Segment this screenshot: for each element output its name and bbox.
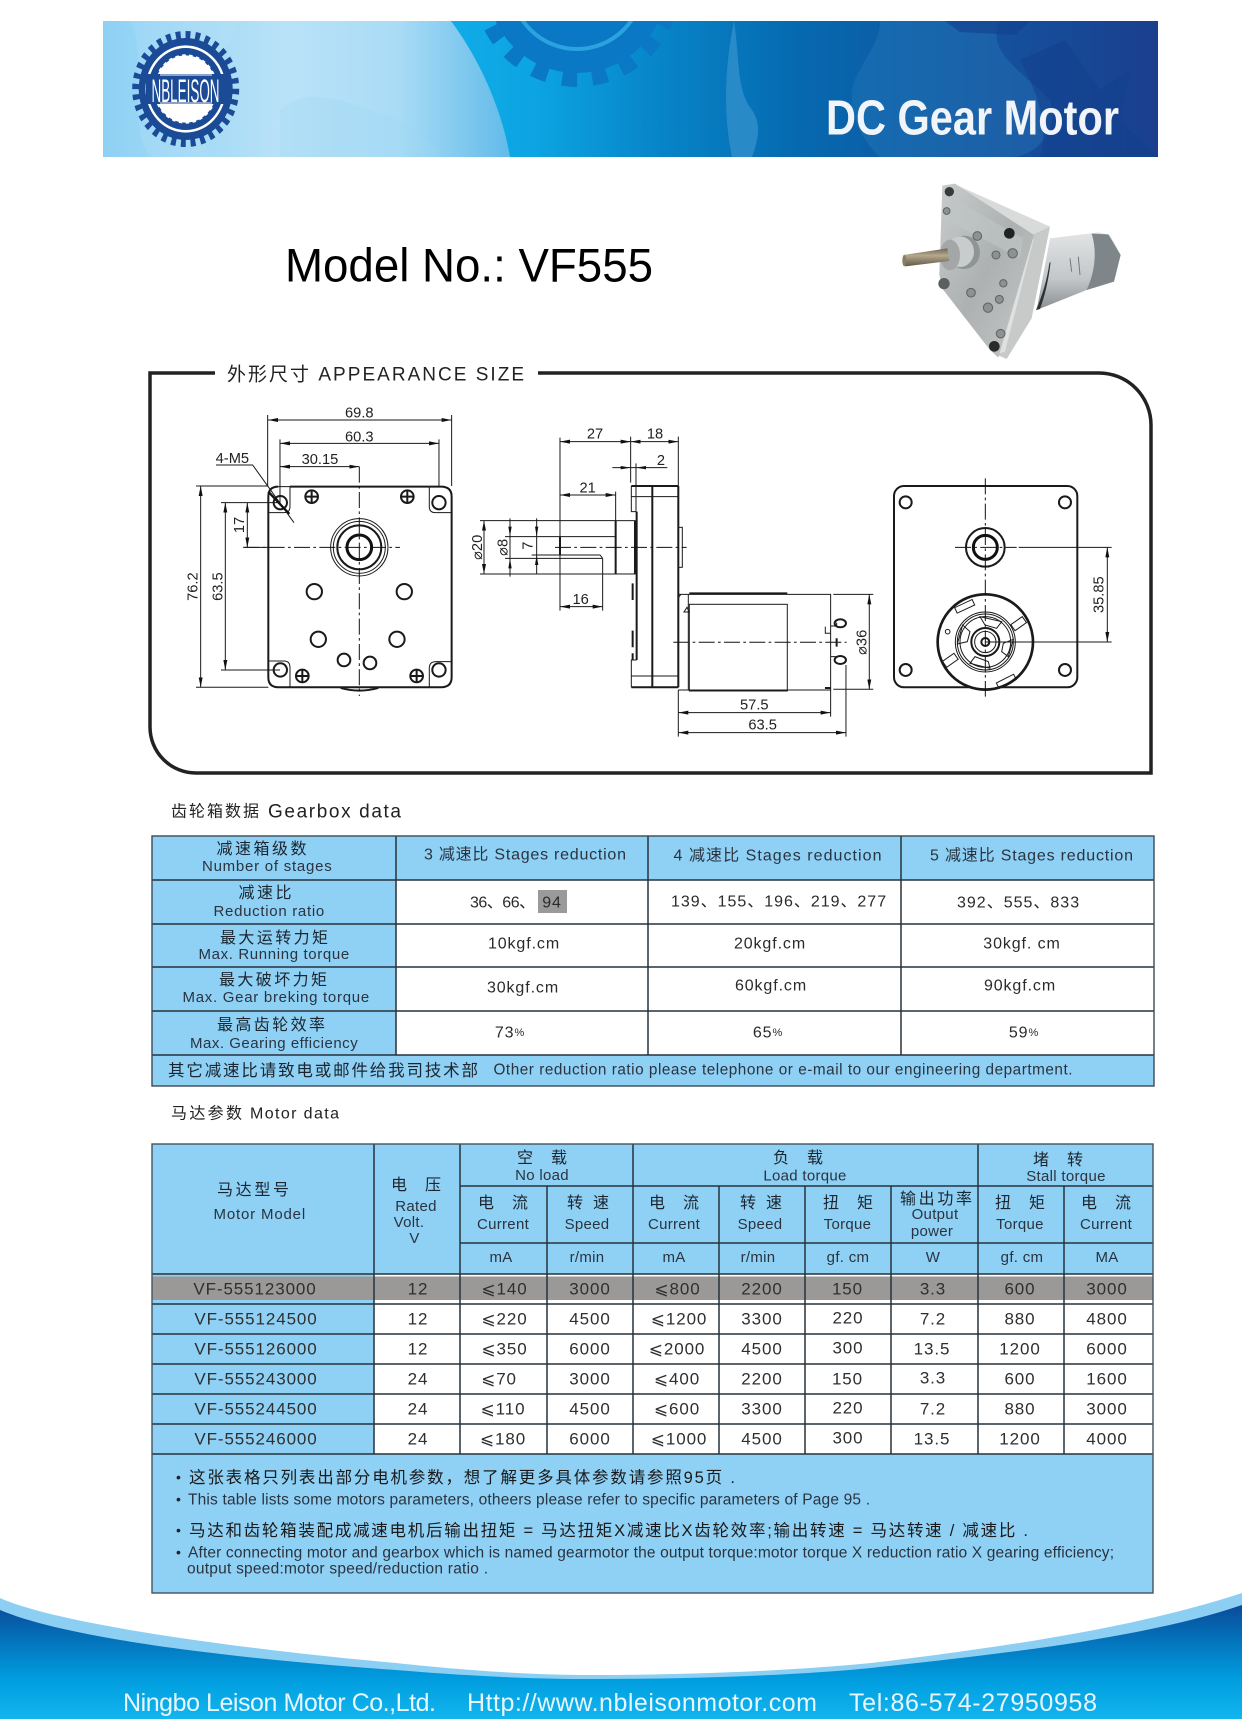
row: VF-555246000: ⩽180 bbox=[480, 1430, 526, 1448]
row: max running torque: 最大运转力矩 bbox=[220, 929, 328, 947]
row: VF-555243000: 2200 bbox=[741, 1370, 783, 1388]
row: VF-555124500: 7.2 bbox=[920, 1310, 946, 1328]
row: VF-555243000 bbox=[194, 1368, 1128, 1388]
row: other ratios note: Other reduction ratio please telephone or e-mail to our engineering department. bbox=[494, 1062, 1072, 1078]
header cells: Current bbox=[477, 1216, 530, 1233]
row: max gear breaking torque: 30kgf.cm bbox=[487, 980, 559, 996]
heading: motor data: Motor data bbox=[250, 1106, 339, 1122]
highlighted ratio 94 bbox=[538, 890, 567, 913]
panel heading: 外形尺寸 APPEARANCE SIZE bbox=[227, 364, 524, 386]
row: VF-555123000: VF-555123000 bbox=[193, 1280, 317, 1298]
heading: gearbox data bbox=[171, 802, 401, 822]
row: VF-555246000: 300 bbox=[832, 1428, 864, 1448]
notes block: • bbox=[176, 1491, 181, 1507]
header cells: r/min bbox=[570, 1249, 604, 1266]
footer contact line bbox=[123, 1689, 1097, 1717]
header cells: mA bbox=[662, 1249, 686, 1266]
drawing: side view: 27 bbox=[587, 426, 603, 442]
row: number of stages: 减速箱级数 bbox=[216, 840, 306, 858]
notes block: 马达和齿轮箱装配成减速电机后输出扭矩 = 马达扭矩X减速比X齿轮效率;输出转速 = 马达转速 / 减速比 . bbox=[189, 1521, 1028, 1540]
row: VF-555124500: ⩽1200 bbox=[651, 1310, 707, 1328]
row: VF-555246000: 1200 bbox=[999, 1430, 1041, 1448]
row: VF-555126000: 6000 bbox=[1086, 1340, 1128, 1358]
header cells: 电 流 bbox=[478, 1194, 528, 1212]
row: VF-555126000: 13.5 bbox=[914, 1340, 950, 1358]
row: VF-555246000: VF-555246000 bbox=[194, 1430, 318, 1448]
row: other ratios note bbox=[168, 1061, 1072, 1080]
row: VF-555126000: 1200 bbox=[999, 1340, 1041, 1358]
row: VF-555124500: 12 bbox=[408, 1310, 428, 1328]
icon: company gear logo: NBLEISON bbox=[152, 73, 220, 109]
drawing: side view: 63.5 bbox=[748, 718, 777, 734]
row: max gearing efficiency bbox=[190, 1016, 1039, 1052]
row: max gearing efficiency: 最高齿轮效率 bbox=[217, 1016, 325, 1034]
row: VF-555123000: 12 bbox=[408, 1280, 428, 1298]
row: VF-555124500: 3300 bbox=[741, 1310, 783, 1328]
row: max gearing efficiency: 59% bbox=[1009, 1024, 1039, 1042]
product photo: gear motor bbox=[902, 184, 1121, 359]
row: VF-555123000: ⩽140 bbox=[481, 1280, 528, 1298]
header cells: 转 速 bbox=[740, 1194, 782, 1212]
drawing: side view: 21 bbox=[579, 480, 596, 496]
row: VF-555126000: ⩽350 bbox=[481, 1340, 528, 1358]
row: VF-555123000: 3000 bbox=[1086, 1280, 1128, 1298]
header cells: 电 流 bbox=[1081, 1194, 1131, 1212]
row: reduction ratio: 139、155、196、219、277 bbox=[671, 894, 887, 910]
heading: motor data: 马达参数 bbox=[171, 1104, 242, 1122]
row: VF-555124500: ⩽220 bbox=[481, 1310, 528, 1328]
row: max running torque: 20kgf.cm bbox=[734, 936, 806, 952]
row: VF-555126000: 4500 bbox=[741, 1340, 783, 1358]
row: VF-555123000: 2200 bbox=[741, 1280, 783, 1298]
row: VF-555244500: VF-555244500 bbox=[194, 1400, 318, 1418]
header cells: Speed bbox=[565, 1216, 609, 1233]
row: VF-555126000 bbox=[194, 1338, 1128, 1358]
heading: gearbox data: Gearbox data bbox=[268, 802, 401, 822]
row: VF-555246000: 13.5 bbox=[914, 1430, 950, 1448]
row: VF-555244500: 880 bbox=[1004, 1400, 1036, 1418]
header cells: Current bbox=[648, 1216, 701, 1233]
header cells: V bbox=[409, 1230, 420, 1247]
row: VF-555244500: 24 bbox=[408, 1400, 428, 1418]
drawing: side view: 7 bbox=[520, 542, 536, 550]
highlighted row band bbox=[152, 1276, 1153, 1300]
header cells: gf. cm bbox=[827, 1249, 869, 1266]
notes block: • bbox=[176, 1544, 181, 1560]
drawing: front view: 4-M5 bbox=[216, 451, 249, 467]
row: VF-555243000: 150 bbox=[832, 1370, 863, 1388]
row: VF-555243000: 600 bbox=[1004, 1370, 1036, 1388]
row: reduction ratio: Reduction ratio bbox=[214, 903, 324, 920]
row: VF-555123000 bbox=[193, 1280, 1128, 1298]
header cells: Current bbox=[1080, 1216, 1133, 1233]
row: max gear breaking torque: 90kgf.cm bbox=[984, 978, 1056, 994]
row: reduction ratio bbox=[214, 884, 1080, 920]
header cells: 扭 矩 bbox=[995, 1194, 1045, 1212]
row: VF-555126000: ⩽2000 bbox=[649, 1340, 705, 1358]
banner title: DC Gear Motor bbox=[826, 92, 1119, 146]
row: other ratios note: 其它减速比请致电或邮件给我司技术部 bbox=[168, 1061, 478, 1080]
row: number of stages: 5 减速比 Stages reduction bbox=[930, 846, 1133, 864]
drawing: side view: ⌀20 bbox=[470, 535, 486, 560]
row: VF-555126000: VF-555126000 bbox=[194, 1340, 318, 1358]
footer contact line: Tel:86-574-27950958 bbox=[849, 1689, 1097, 1717]
header cells: 扭 矩 bbox=[823, 1194, 873, 1212]
notes block: This table lists some motors parameters, otheers please refer to specific parameters of Page 95 . bbox=[188, 1492, 870, 1508]
row: VF-555246000 bbox=[194, 1428, 1128, 1448]
header banner bbox=[103, 21, 1158, 157]
header cells: Rated bbox=[395, 1198, 437, 1215]
notes block: output speed:motor speed/reduction ratio . bbox=[187, 1560, 488, 1578]
header cells: Stall torque bbox=[1026, 1168, 1106, 1185]
row: max gearing efficiency: Max. Gearing efficiency bbox=[190, 1035, 358, 1052]
row: VF-555244500 bbox=[194, 1398, 1128, 1418]
row: max running torque: 10kgf.cm bbox=[488, 936, 560, 952]
row: max gear breaking torque bbox=[182, 971, 1056, 1006]
header cells: r/min bbox=[741, 1249, 775, 1266]
drawing: rear view bbox=[894, 478, 1112, 697]
model number heading: Model No.: VF555 bbox=[285, 238, 653, 292]
drawing: rear view: 35.85 bbox=[1091, 576, 1107, 613]
row: number of stages: 4 减速比 Stages reduction bbox=[674, 846, 882, 864]
drawing: front view: 30.15 bbox=[302, 452, 338, 468]
panel: appearance size bbox=[150, 364, 1151, 773]
row: VF-555243000: 3000 bbox=[569, 1370, 611, 1388]
icon: company gear logo bbox=[137, 36, 235, 142]
footer contact line: Ningbo Leison Motor Co.,Ltd. bbox=[123, 1689, 436, 1717]
header cells: No load bbox=[515, 1167, 569, 1184]
row: VF-555124500: 880 bbox=[1004, 1310, 1036, 1328]
row: reduction ratio: 94 bbox=[542, 894, 562, 912]
row: VF-555244500: ⩽110 bbox=[481, 1400, 525, 1418]
row: VF-555123000: ⩽800 bbox=[654, 1280, 701, 1298]
drawing: front view: 60.3 bbox=[345, 429, 374, 445]
footer band bbox=[0, 1593, 1242, 1719]
row: VF-555244500: 7.2 bbox=[920, 1400, 946, 1418]
row: VF-555124500: 4800 bbox=[1086, 1310, 1128, 1328]
row: VF-555123000: 600 bbox=[1004, 1280, 1036, 1298]
row: max running torque: 30kgf. cm bbox=[983, 936, 1061, 952]
row: reduction ratio: 392、555、833 bbox=[957, 894, 1080, 912]
row: VF-555243000: VF-555243000 bbox=[194, 1370, 318, 1388]
row: VF-555126000: 300 bbox=[832, 1338, 864, 1358]
row: reduction ratio: 减速比 bbox=[238, 884, 292, 902]
header cells: 堵 转 bbox=[1033, 1151, 1083, 1169]
row: max gearing efficiency: 65% bbox=[753, 1024, 783, 1042]
row: max gear breaking torque: 最大破坏力矩 bbox=[219, 971, 327, 989]
row: VF-555123000: 3.3 bbox=[920, 1280, 946, 1298]
notes block: 这张表格只列表出部分电机参数，想了解更多具体参数请参照95页 . bbox=[189, 1468, 735, 1487]
row: max gear breaking torque: Max. Gear breking torque bbox=[182, 989, 370, 1006]
row: VF-555246000: 6000 bbox=[569, 1430, 611, 1448]
row: VF-555244500: 3000 bbox=[1086, 1400, 1128, 1418]
drawing: front view: 17 bbox=[232, 517, 248, 533]
row: VF-555124500: 220 bbox=[832, 1308, 864, 1328]
header cells: power bbox=[911, 1223, 953, 1240]
drawing: side view: 16 bbox=[572, 592, 589, 608]
header cells: Volt. bbox=[394, 1214, 424, 1231]
header cells: Speed bbox=[738, 1216, 782, 1233]
header cells: Output bbox=[912, 1206, 959, 1223]
heading: motor data bbox=[171, 1104, 339, 1122]
drawing: side view: 2 bbox=[657, 453, 665, 469]
header cells: Load torque bbox=[763, 1168, 847, 1185]
header cells: 电 压 bbox=[391, 1176, 441, 1194]
row: VF-555243000: ⩽70 bbox=[481, 1370, 517, 1388]
row: VF-555243000: 1600 bbox=[1086, 1370, 1128, 1388]
row: VF-555246000: 4000 bbox=[1086, 1430, 1128, 1448]
row: VF-555243000: ⩽400 bbox=[654, 1370, 700, 1388]
notes block: • bbox=[176, 1469, 181, 1485]
header cells: 马达型号 bbox=[217, 1181, 289, 1199]
row: VF-555246000: 4500 bbox=[741, 1430, 783, 1448]
row: max gear breaking torque: 60kgf.cm bbox=[735, 978, 807, 994]
row: VF-555243000: 24 bbox=[408, 1370, 428, 1388]
header cells bbox=[214, 1149, 1133, 1266]
notes block: After connecting motor and gearbox which is named gearmotor the output torque:motor torque X reduction ratio X gearing efficiency; bbox=[188, 1544, 1114, 1562]
row: VF-555124500 bbox=[194, 1308, 1128, 1328]
row: VF-555126000: 12 bbox=[408, 1340, 428, 1358]
row: VF-555124500: VF-555124500 bbox=[194, 1310, 318, 1328]
row: reduction ratio: 36、66、 bbox=[470, 894, 536, 912]
heading: gearbox data: 齿轮箱数据 bbox=[171, 802, 259, 820]
notes block bbox=[176, 1468, 1114, 1578]
row: number of stages: 3 减速比 Stages reduction bbox=[424, 846, 626, 864]
header cells: 转 速 bbox=[567, 1194, 609, 1212]
header cells: MA bbox=[1095, 1249, 1119, 1266]
drawing: side view: ⌀8 bbox=[495, 539, 511, 556]
row: VF-555246000: 24 bbox=[408, 1430, 428, 1448]
header cells: 空 载 bbox=[517, 1149, 567, 1167]
row: VF-555244500: 4500 bbox=[569, 1400, 611, 1418]
row: VF-555244500: 220 bbox=[832, 1398, 864, 1418]
row: number of stages bbox=[202, 840, 1133, 875]
drawing: side view bbox=[470, 426, 873, 737]
drawing: front view: 63.5 bbox=[210, 572, 226, 601]
drawing: side view: 18 bbox=[647, 426, 663, 442]
footer contact line: Http://www.nbleisonmotor.com bbox=[467, 1689, 817, 1717]
row: max gearing efficiency: 73% bbox=[495, 1024, 525, 1042]
header cells: 负 载 bbox=[773, 1149, 823, 1167]
row: VF-555126000: 6000 bbox=[569, 1340, 611, 1358]
row: VF-555123000: 3000 bbox=[569, 1280, 611, 1298]
header cells: 输出功率 bbox=[900, 1190, 972, 1208]
drawing: front view: 69.8 bbox=[345, 405, 374, 421]
drawing: side view: 57.5 bbox=[740, 698, 769, 714]
header cells: Torque bbox=[996, 1216, 1044, 1233]
row: VF-555244500: ⩽600 bbox=[654, 1400, 700, 1418]
row: max running torque bbox=[198, 929, 1061, 963]
header cells: mA bbox=[489, 1249, 513, 1266]
header cells: W bbox=[926, 1249, 941, 1266]
notes block: • bbox=[176, 1522, 181, 1538]
row: VF-555243000: 3.3 bbox=[920, 1368, 946, 1388]
header cells: 电 流 bbox=[649, 1194, 699, 1212]
drawing: side view: ⌀36 bbox=[855, 630, 871, 655]
row: VF-555246000: ⩽1000 bbox=[651, 1430, 707, 1448]
row: number of stages: Number of stages bbox=[202, 858, 332, 875]
header cells: Torque bbox=[824, 1216, 871, 1233]
table: motor data bbox=[152, 1144, 1153, 1593]
header cells: gf. cm bbox=[1001, 1249, 1043, 1266]
row: VF-555124500: 4500 bbox=[569, 1310, 611, 1328]
table: gearbox data bbox=[152, 836, 1154, 1086]
drawing: front view bbox=[185, 405, 452, 696]
header cells: Motor Model bbox=[214, 1206, 306, 1223]
row: VF-555123000: 150 bbox=[832, 1280, 863, 1298]
drawing: front view: 76.2 bbox=[185, 572, 201, 601]
row: VF-555244500: 3300 bbox=[741, 1400, 783, 1418]
row: max running torque: Max. Running torque bbox=[198, 946, 350, 963]
